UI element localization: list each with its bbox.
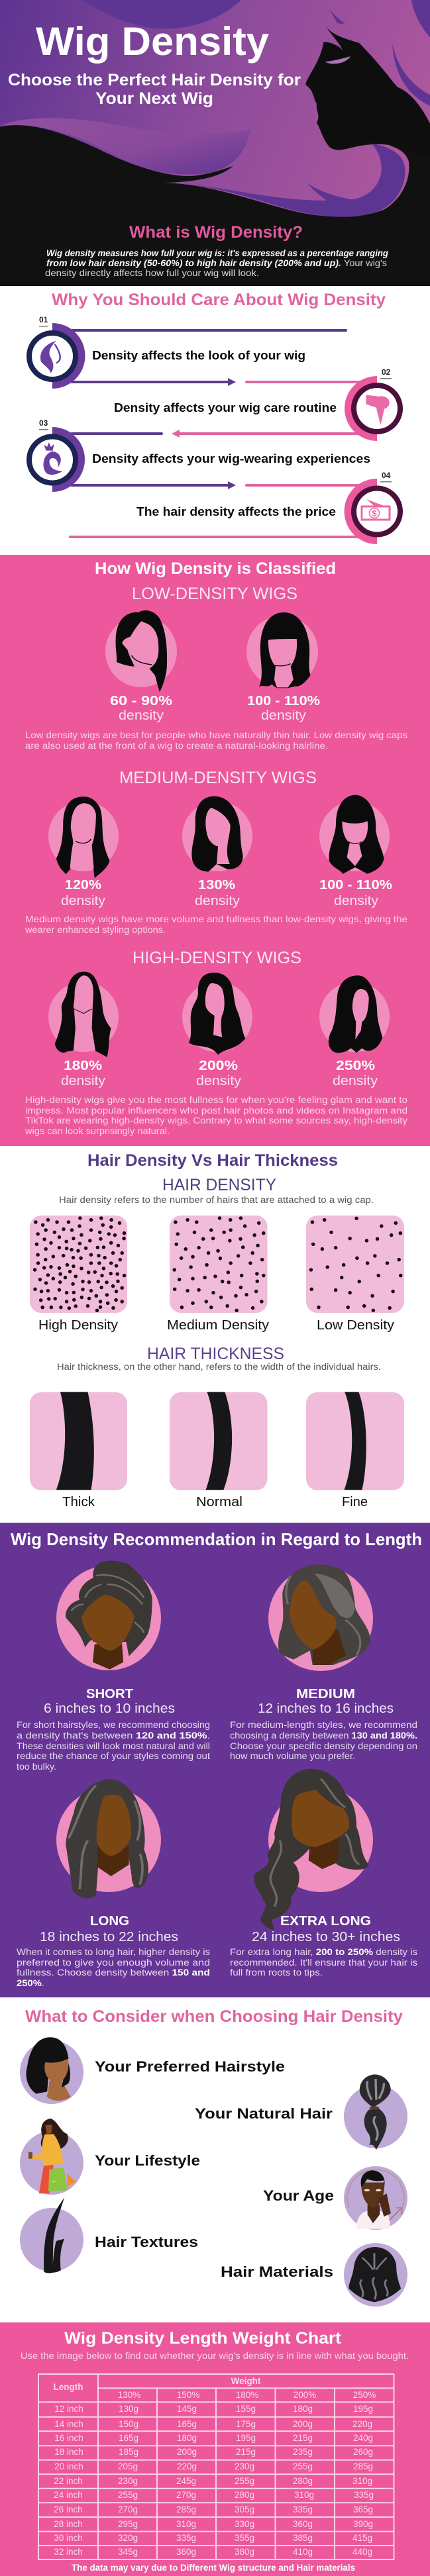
item: materials (221, 2243, 407, 2307)
table: weight by length and density (38, 2374, 394, 2560)
label: 100-110% (247, 694, 320, 723)
label: 120%: 120% (65, 878, 101, 892)
table rows: 335g (354, 2490, 374, 2500)
label: medium 100-110%: density (334, 894, 378, 908)
density labels: Medium Density (167, 1318, 269, 1333)
text: long: fullness. Choose density between 150 and (17, 1968, 210, 1978)
text block: definition: Wig density measures how full your wig is: it's expressed as a percentage ranging (46, 248, 389, 258)
heading: Wig Density Recommendation in Regard to Length (11, 1529, 422, 1549)
text: medium: choosing a density between 130 and 180%. (230, 1731, 417, 1741)
table rows: 18 inch (54, 2447, 83, 2457)
subheading: hair density: HAIR DENSITY (162, 1176, 276, 1194)
subtitle (8, 71, 301, 108)
text: short: a density that's between 120 and 150% . (17, 1731, 210, 1741)
wig: 120% (48, 796, 119, 879)
table rows: 205g (118, 2461, 138, 2471)
wig: 100-110% (246, 612, 318, 688)
table rows: 230g (118, 2476, 138, 2486)
text: short: reduce the chance of your styles coming out (17, 1751, 210, 1761)
text: long: When it comes to long hair, higher density is (17, 1947, 210, 1957)
text: low density description (25, 730, 407, 751)
text: medium: 12 inches to 16 inches (258, 1701, 394, 1716)
heading: Wig Density Length Weight Chart (64, 2329, 342, 2348)
table header: Length (53, 2382, 83, 2392)
text: medium (230, 1687, 417, 1761)
table rows: 230g (235, 2461, 254, 2471)
panel: density recommendation by length (0, 1523, 430, 1997)
illustration: short wig (56, 1560, 161, 1670)
table rows: 215g (293, 2433, 313, 2443)
heading: Why You Should Care About Wig Density (52, 291, 386, 309)
text: high density description: TikTok are wearing high-density wigs. Contrary to what some sources say, high-density (25, 1116, 407, 1125)
table rows: 415g (352, 2533, 372, 2543)
panel: length weight chart (0, 2322, 430, 2576)
text: extra long: 24 inches to 30+ inches (252, 1930, 400, 1944)
text: short: SHORT (86, 1687, 133, 1701)
table rows: 16 inch (54, 2433, 83, 2443)
text: long: preferred to give you enough volume and (17, 1958, 210, 1968)
table rows: 200g (177, 2447, 197, 2457)
item: natural hair (195, 2074, 407, 2150)
table rows: 30 inch (54, 2533, 83, 2543)
wig: medium bangs 100-110% (319, 795, 390, 874)
table rows (54, 2404, 374, 2557)
text block: definition (45, 248, 389, 278)
density labels (38, 1318, 394, 1333)
table rows: 410g (293, 2547, 313, 2557)
step 1 (29, 315, 305, 389)
text: long: 18 inches to 22 inches (40, 1930, 178, 1944)
subheading: medium density: MEDIUM-DENSITY WIGS (119, 769, 317, 787)
chart: high density dots (30, 1216, 127, 1313)
text: medium: how much volume you prefer. (230, 1751, 355, 1761)
heading: Hair Density Vs Hair Thickness (87, 1151, 338, 1170)
label: 100-110%: 100 - 110% (247, 694, 320, 708)
table rows: 220g (352, 2419, 372, 2429)
label: 200%: 200% (199, 1059, 238, 1073)
table rows: 220g (177, 2461, 197, 2471)
step 2: Density affects your wig care routine (114, 401, 337, 414)
table rows: 165g (177, 2419, 197, 2429)
table rows: 235g (293, 2447, 313, 2457)
table rows: 270g (118, 2504, 138, 2514)
thickness labels (62, 1495, 368, 1509)
text: short: 6 inches to 10 inches (44, 1701, 175, 1716)
table rows: 200g (293, 2419, 313, 2429)
chart: low density dots (306, 1216, 404, 1313)
label: 60-90%: density (119, 708, 164, 723)
text: high density description: High-density wigs give you the most fullness for when you're feeling glam and want to (25, 1095, 407, 1105)
table rows: 240g (353, 2433, 373, 2443)
text: chart intro: Use the image below to find out whether your wig's density is in line with what you bought. (21, 2351, 409, 2361)
table header (53, 2376, 376, 2400)
table rows: 310g (352, 2476, 372, 2486)
panel: why you should care (29, 291, 400, 544)
table header: 180% (236, 2390, 258, 2400)
table rows: 14 inch (54, 2419, 83, 2429)
item: preferred hairstyle: Your Preferred Hairstyle (95, 2058, 285, 2075)
table rows: 360g (293, 2519, 313, 2529)
panel: what to consider (20, 2007, 412, 2307)
table rows: 335g (176, 2533, 196, 2543)
wig: 200% (182, 973, 252, 1055)
label: 100-110%: density (261, 708, 306, 723)
label: 250%: 250% (336, 1059, 375, 1073)
item: textures: Hair Textures (95, 2234, 198, 2250)
table header: 200% (294, 2390, 316, 2400)
table rows: 150g (119, 2419, 138, 2429)
text: medium: For medium-length styles, we recommend (230, 1720, 417, 1730)
label: 250% (333, 1059, 378, 1088)
text: long (17, 1914, 210, 1988)
item: materials: Hair Materials (221, 2264, 333, 2280)
wig: 250% (319, 975, 390, 1053)
label: 250%: density (333, 1074, 378, 1088)
item: lifestyle (20, 2119, 200, 2195)
diagram: normal hair (170, 1392, 268, 1490)
text: high density description: wigs can look surprisingly natural. (25, 1126, 170, 1136)
label: 120% (61, 878, 105, 908)
illustration: medium wig (268, 1564, 373, 1671)
table rows: 215g (236, 2447, 256, 2457)
table header: 150% (177, 2390, 199, 2400)
subheading: hair thickness: HAIR THICKNESS (147, 1345, 284, 1363)
text: medium density description: wearer enhanced styling options. (25, 925, 166, 935)
panel: hair density vs hair thickness (30, 1151, 404, 1509)
table rows: 305g (235, 2504, 254, 2514)
label: 60-90% (110, 694, 172, 723)
panel: hero (0, 0, 430, 286)
table rows: 345g (118, 2547, 138, 2557)
label: 130%: 130% (198, 878, 235, 892)
label: 180%: 180% (64, 1059, 102, 1073)
item: preferred hairstyle (20, 2037, 285, 2104)
subtitle: Your Next Wig (95, 89, 213, 108)
table rows: 310g (294, 2490, 314, 2500)
label: medium 100-110% (319, 878, 392, 908)
table rows: 360g (176, 2547, 196, 2557)
label: 130% (195, 878, 240, 908)
table rows: 32 inch (54, 2547, 83, 2557)
text: medium density description (25, 914, 407, 935)
text: short (17, 1687, 210, 1772)
table rows: 260g (353, 2447, 373, 2457)
icon: money: $ (372, 508, 377, 518)
table rows: 295g (118, 2519, 138, 2529)
subheading: high density: HIGH-DENSITY WIGS (133, 949, 301, 967)
table rows: 280g (293, 2476, 313, 2486)
table rows: 24 inch (54, 2490, 83, 2500)
item: age: Your Age (263, 2187, 334, 2204)
table rows: 280g (235, 2490, 254, 2500)
label: 60-90%: 60 - 90% (110, 694, 172, 708)
step 1: Density affects the look of your wig (92, 349, 305, 362)
table header: 130% (118, 2390, 140, 2400)
icon: woman with flowing hair (40, 341, 60, 373)
table rows: 385g (293, 2533, 313, 2543)
wig: 180% (48, 972, 119, 1057)
table rows: 175g (236, 2419, 256, 2429)
table rows: 380g (235, 2547, 254, 2557)
text: low density description: Low density wigs are best for people who have naturally thin hair. Low density wig caps (25, 730, 407, 740)
item: natural hair: Your Natural Hair (195, 2105, 333, 2122)
step 3: 03 (39, 418, 48, 428)
table rows: 165g (119, 2433, 138, 2443)
step 3: Density affects your wig-wearing experiences (92, 452, 370, 465)
item: lifestyle: Your Lifestyle (95, 2152, 200, 2169)
text: short: For short hairstyles, we recommend choosing (17, 1720, 210, 1730)
subheading: low density: LOW-DENSITY WIGS (132, 585, 297, 603)
table rows: 255g (118, 2490, 138, 2500)
item: age (263, 2162, 412, 2234)
heading: What to Consider when Choosing Hair Density (25, 2007, 403, 2026)
panel: how wig density is classified (0, 555, 430, 1146)
text: medium density description: Medium density wigs have more volume and fullness than low-density wigs, giving the (25, 914, 407, 924)
diagram: thick hair (30, 1392, 127, 1490)
label: medium 100-110%: 100 - 110% (319, 878, 392, 892)
table rows: 390g (353, 2519, 373, 2529)
label: 120%: density (61, 894, 105, 908)
table rows: 255g (293, 2461, 313, 2471)
table rows: 320g (118, 2533, 138, 2543)
table rows: 130g (119, 2404, 138, 2414)
table rows: 365g (353, 2504, 373, 2514)
connector lines and arrows (70, 330, 361, 537)
chart: medium density dots (170, 1216, 268, 1313)
title: Wig Density (36, 19, 270, 64)
text: medium: Choose your specific density depending on (230, 1741, 417, 1751)
table rows: 12 inch (54, 2404, 83, 2414)
text: long: LONG (90, 1914, 129, 1929)
icon: hair with crown (44, 442, 62, 475)
table rows: 26 inch (54, 2504, 83, 2514)
table rows: 180g (177, 2433, 197, 2443)
table rows: 185g (119, 2447, 138, 2457)
step 4 (136, 471, 400, 544)
text: medium: MEDIUM (296, 1687, 355, 1701)
table rows: 20 inch (54, 2461, 83, 2471)
table rows: 155g (236, 2404, 256, 2414)
diagram: fine hair (306, 1392, 404, 1490)
text: hair thickness definition: Hair thickness, on the other hand, refers to the width of the individual hairs. (57, 1362, 381, 1372)
text: extra long: EXTRA LONG (280, 1914, 371, 1929)
step 2 (114, 367, 400, 441)
footnote: The data may vary due to Different Wig structure and Hair materials (72, 2562, 355, 2573)
table rows: 355g (235, 2533, 254, 2543)
text: extra long: For extra long hair, 200 to 250% density is (230, 1947, 417, 1957)
table rows: 335g (293, 2504, 313, 2514)
wig: 60-90% (105, 610, 177, 692)
text: short: too bulky. (17, 1762, 56, 1772)
text: long: 250%. (17, 1978, 44, 1988)
illustration: extra long wig (254, 1769, 373, 1930)
table rows: 285g (353, 2461, 373, 2471)
density labels: High Density (38, 1318, 118, 1333)
thickness labels: Thick (62, 1495, 95, 1509)
text: short: These densities will look most natural and will (17, 1741, 210, 1751)
table rows: 270g (176, 2490, 196, 2500)
table rows: 440g (352, 2547, 372, 2557)
table rows: 285g (176, 2504, 196, 2514)
step 1: 01 (39, 315, 48, 324)
table rows: 22 inch (54, 2476, 83, 2486)
table header: 250% (353, 2390, 376, 2400)
label: 200%: density (196, 1074, 241, 1088)
text: low density description: are also used at the front of a wig to create a natural-looking hairline. (25, 741, 328, 751)
illustration: woman silhouette with flowing hair (0, 0, 430, 286)
step 4: 04 (382, 471, 391, 480)
icon: hair dryer (366, 395, 390, 425)
table rows: 195g (236, 2433, 256, 2443)
table header: Weight (231, 2376, 261, 2386)
text block: definition: from low hair density (50-60%) to high hair density (200% and up). (46, 258, 341, 268)
text block: definition: Your wig's (344, 258, 387, 268)
text: hair density definition: Hair density refers to the number of hairs that are attached to a wig cap. (59, 1195, 374, 1205)
thickness labels: Normal (196, 1495, 242, 1509)
item: textures (20, 2197, 198, 2273)
text: extra long (230, 1914, 417, 1978)
table rows: 28 inch (54, 2519, 83, 2529)
icon: money (362, 499, 391, 520)
table rows: 330g (235, 2519, 254, 2529)
density labels: Low Density (317, 1318, 394, 1333)
label: 130%: density (195, 894, 240, 908)
label: 180% (61, 1059, 105, 1088)
text: high density description: impress. Most popular influencers who post hair photos and videos on Instagram and (25, 1106, 407, 1116)
table rows: 245g (176, 2476, 196, 2486)
illustration: long wig (56, 1779, 161, 1898)
item: lifestyle: SALE (52, 2181, 56, 2182)
table rows: 145g (177, 2404, 197, 2414)
text block: definition: density directly affects how full your wig will look. (45, 268, 259, 278)
step 2: 02 (382, 367, 391, 377)
wig: 130% (182, 796, 252, 872)
text: high density description (25, 1095, 407, 1136)
heading: what is wig density: What is Wig Density? (129, 223, 303, 242)
table rows: 180g (293, 2404, 313, 2414)
label: 180%: density (61, 1074, 105, 1088)
table rows: 310g (176, 2519, 196, 2529)
step 3 (29, 418, 370, 492)
heading: How Wig Density is Classified (95, 559, 336, 578)
label: 200% (196, 1059, 241, 1088)
table rows: 195g (353, 2404, 373, 2414)
table rows: 255g (235, 2476, 254, 2486)
thickness labels: Fine (342, 1495, 368, 1509)
text: extra long: recommended. It'll ensure that your hair is (230, 1958, 417, 1968)
text: extra long: full from roots to tips. (230, 1968, 323, 1978)
subtitle: Choose the Perfect Hair Density for (8, 71, 301, 89)
step 4: The hair density affects the price (136, 505, 336, 518)
